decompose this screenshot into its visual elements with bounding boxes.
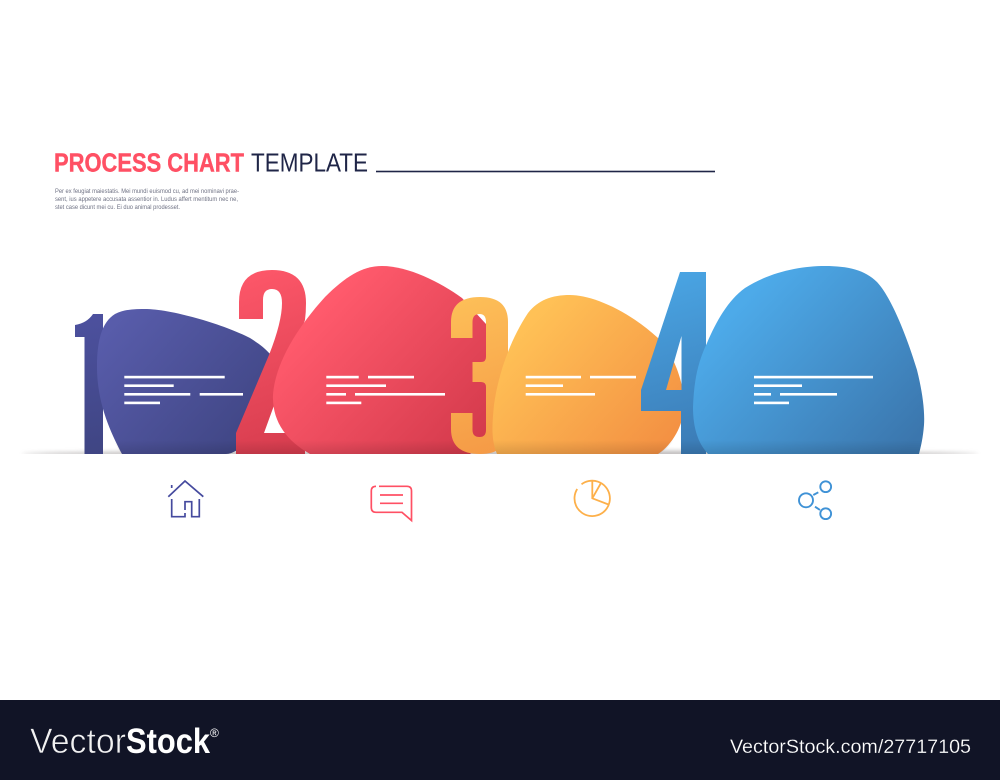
- blob 1: [97, 309, 270, 454]
- icon: house: [168, 481, 203, 517]
- footer bar: [0, 700, 1000, 780]
- footer logo: Stock: [126, 722, 210, 761]
- icon: pie chart: [574, 481, 610, 516]
- description text: sent, ius appetere accusata assentior in. Ludus affert mentitum nec ne,: [55, 196, 238, 203]
- step 1 number and shape: [75, 309, 270, 454]
- text lines: step 4: [754, 376, 873, 404]
- step 3 number and shape: [451, 295, 684, 454]
- icon: share: [799, 481, 831, 519]
- title: [54, 148, 715, 178]
- footer logo: Vector: [30, 722, 126, 761]
- number 3: [451, 297, 508, 454]
- number 1: [75, 314, 103, 454]
- blob 4: [693, 266, 924, 454]
- text lines: step 2: [326, 376, 445, 404]
- footer logo: [30, 722, 219, 761]
- number 4: [641, 272, 706, 454]
- number 2: [236, 270, 306, 454]
- title: TEMPLATE: [251, 148, 368, 178]
- text lines: step 1: [124, 376, 243, 404]
- title: PROCESS CHART: [54, 148, 244, 178]
- footer logo: ®: [210, 726, 219, 740]
- footer image id: VectorStock.com/27717105: [730, 737, 971, 758]
- text lines: step 3: [526, 376, 636, 396]
- blob 2: [273, 266, 496, 454]
- step 4 number and shape: [641, 266, 924, 454]
- ground shadow: [22, 450, 978, 458]
- icon: speech bubble: [371, 486, 412, 520]
- white ground cover: [0, 454, 1000, 700]
- blob 3: [492, 295, 684, 454]
- description text: [55, 188, 239, 211]
- description text: Per ex feugiat maiestatis. Mei mundi euismod cu, ad mei nominavi prae-: [55, 188, 239, 195]
- description text: stet case dicunt mei cu. Ei duo animal prodesset.: [55, 204, 180, 211]
- step 2 number and shape: [236, 266, 496, 454]
